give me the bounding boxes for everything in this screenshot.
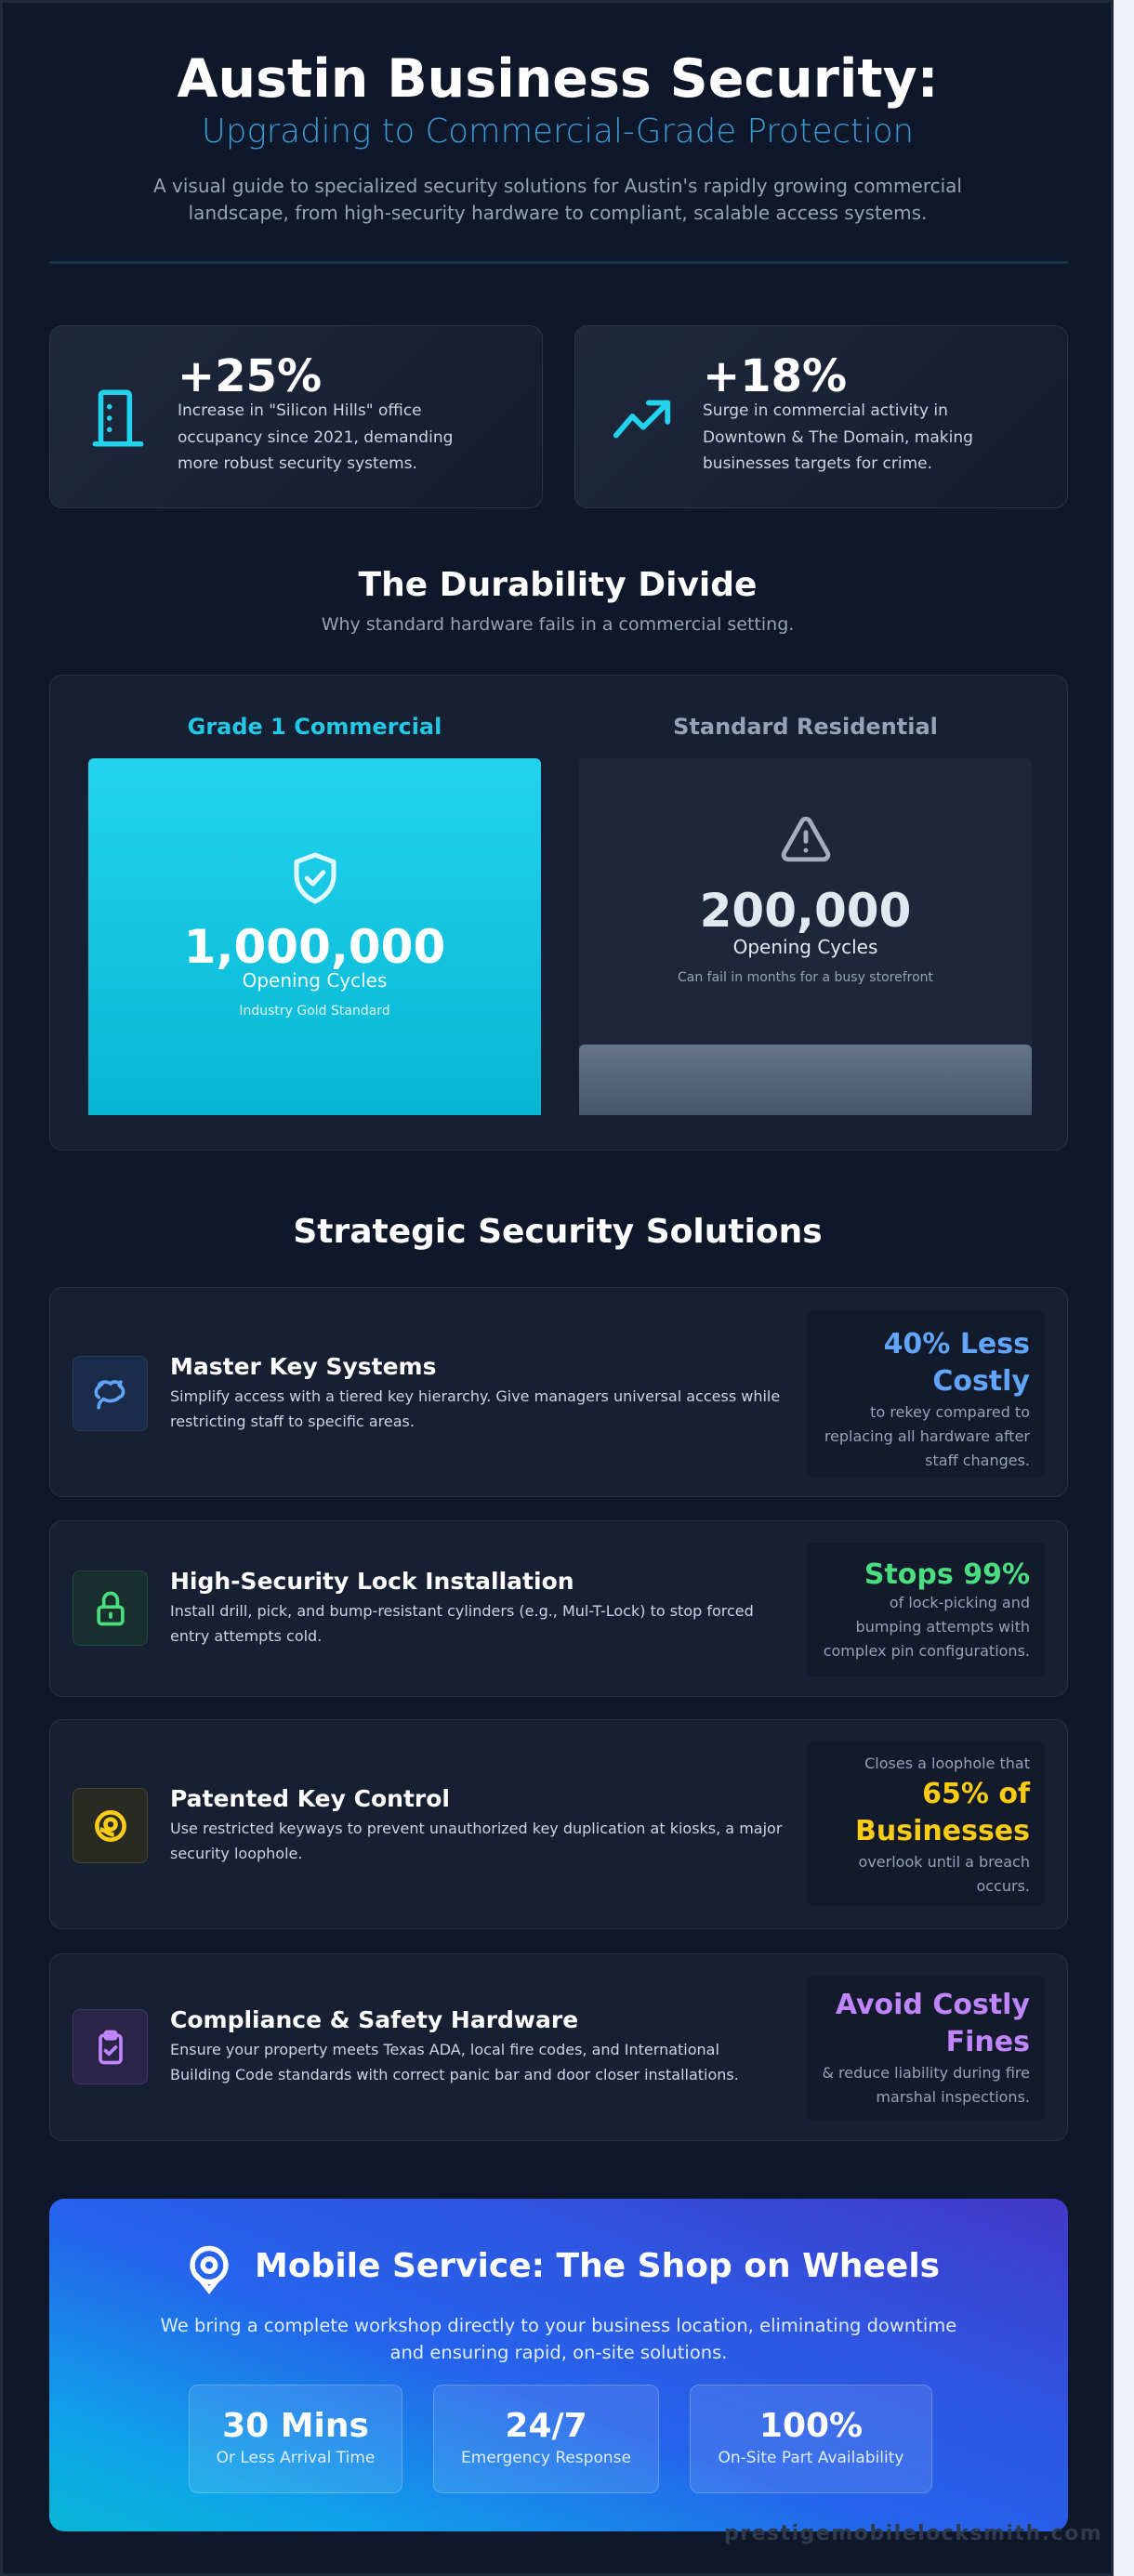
description: Simplify access with a tiered key hierarchy. Give managers universal access while restricting staff to specific areas. <box>170 1387 780 1430</box>
intro text: A visual guide to specialized security solutions for Austin's rapidly growing commercial landscape, from high-security hardware to compliant, scalable access systems. <box>153 175 962 224</box>
bar: residential <box>579 758 1032 1115</box>
stat box: & reduce liability during fire marshal inspections. <box>822 2064 1030 2106</box>
stat: emergency: 24/7 <box>505 2407 587 2445</box>
bar: residential: Opening Cycles <box>733 936 877 958</box>
bar: residential: 200,000 <box>700 884 911 938</box>
stat box: to rekey compared to replacing all hardware after staff changes. <box>824 1403 1030 1469</box>
stat number: +25% <box>178 350 322 402</box>
stat box: Closes a loophole that overlook until a breach occurs. <box>859 1755 1030 1895</box>
card: high-security lock <box>49 1520 1068 1697</box>
stat box: Stops 99% <box>864 1558 1030 1591</box>
stat text: Increase in "Silicon Hills" office occupancy since 2021, demanding more robust security systems. <box>178 401 453 473</box>
stat number: +18% <box>703 350 847 402</box>
icon: building <box>93 390 143 446</box>
description: We bring a complete workshop directly to your business location, eliminating downtime and ensuring rapid, on-site solutions. <box>161 2315 956 2363</box>
subtitle: Upgrading to Commercial-Grade Protection <box>202 112 914 151</box>
stat: arrival: Or Less Arrival Time <box>217 2449 375 2467</box>
panel: mobile service <box>49 2199 1068 2531</box>
icon: clipboard <box>73 2009 148 2084</box>
stat: parts <box>690 2385 932 2493</box>
stat: arrival: 30 Mins <box>222 2407 369 2445</box>
bar: commercial <box>88 758 541 1115</box>
stat box: 65% of Businesses <box>855 1778 1030 1847</box>
stat: emergency <box>433 2385 659 2493</box>
description: Install drill, pick, and bump-resistant cylinders (e.g., Mul-T-Lock) to stop forced entry attempts cold. <box>170 1602 754 1645</box>
watermark: prestigemobilelocksmith.com <box>724 2522 1102 2545</box>
stat: parts: 100% <box>759 2407 863 2445</box>
bar: commercial: Opening Cycles <box>243 969 387 992</box>
title: Compliance & Safety Hardware <box>170 2006 578 2033</box>
title: Patented Key Control <box>170 1785 450 1812</box>
title: Master Key Systems <box>170 1353 436 1380</box>
panel: durability comparison <box>49 675 1068 1150</box>
heading with icon: Mobile Service: The Shop on Wheels <box>255 2247 940 2285</box>
stat box <box>807 1741 1045 1906</box>
stat text: Surge in commercial activity in Downtown & The Domain, making businesses targets for crime. <box>703 401 973 473</box>
stat box <box>807 1309 1045 1477</box>
bar: residential: Can fail in months for a busy storefront <box>678 970 933 985</box>
bar: commercial: Industry Gold Standard <box>239 1004 390 1019</box>
icon: trend arrow <box>613 400 671 439</box>
label: grade 1: Grade 1 Commercial <box>188 714 442 740</box>
stat card: office occupancy <box>49 325 543 508</box>
description: Use restricted keyways to prevent unauthorized key duplication at kiosks, a major security loophole. <box>170 1820 782 1862</box>
description: Ensure your property meets Texas ADA, local fire codes, and International Building Code standards with correct panic bar and door closer installations. <box>170 2041 739 2083</box>
card: master key systems <box>49 1287 1068 1497</box>
stat box: 40% Less Costly <box>884 1328 1030 1398</box>
card: compliance hardware <box>49 1953 1068 2141</box>
bar: commercial: 1,000,000 <box>184 920 445 974</box>
title: Austin Business Security: <box>177 48 939 110</box>
stat: parts: On-Site Part Availability <box>719 2449 903 2467</box>
icon: lock <box>73 1571 148 1646</box>
subheading: Why standard hardware fails in a commercial setting. <box>322 614 794 635</box>
icon: warning <box>781 816 831 862</box>
title: High-Security Lock Installation <box>170 1568 574 1595</box>
icon: shield check <box>294 853 336 903</box>
stat card: commercial activity <box>574 325 1068 508</box>
stat box: Avoid Costly Fines <box>836 1989 1030 2058</box>
icon: master key <box>73 1356 148 1431</box>
heading: durability divide: The Durability Divide <box>359 566 757 604</box>
card: patented key control <box>49 1719 1068 1929</box>
heading: strategic solutions: Strategic Security Solutions <box>293 1213 823 1251</box>
stat: arrival <box>189 2385 402 2493</box>
stat box <box>807 1976 1045 2121</box>
icon: mobile lock <box>190 2245 229 2294</box>
icon: key control <box>73 1788 148 1863</box>
stat box <box>807 1543 1045 1676</box>
stat: emergency: Emergency Response <box>461 2449 631 2467</box>
label: standard residential: Standard Residential <box>673 714 938 740</box>
stat box: of lock-picking and bumping attempts with complex pin configurations. <box>824 1594 1030 1660</box>
